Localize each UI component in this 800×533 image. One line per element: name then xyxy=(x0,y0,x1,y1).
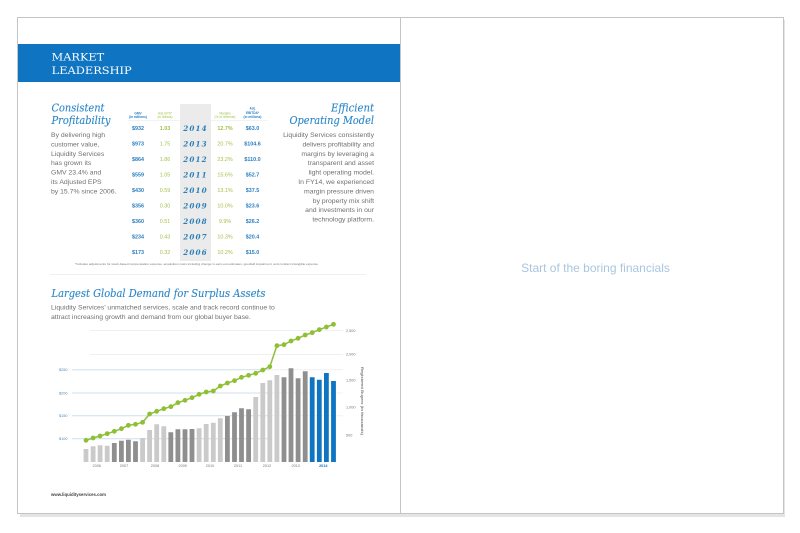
right axis labels: 2,000 xyxy=(346,352,356,356)
year column xyxy=(182,124,208,257)
left heading: Consistent Profitability xyxy=(51,102,111,127)
Adjusted EBITDA column: $15.0 xyxy=(246,250,259,256)
right axis labels xyxy=(346,329,356,438)
column headers: Adj. xyxy=(249,106,256,110)
margins column: 13.1% xyxy=(217,188,233,194)
year column: 2014 xyxy=(182,124,208,133)
x axis labels: 2006 xyxy=(92,464,101,468)
x axis labels: 2011 xyxy=(234,464,242,468)
footer URL: www.liquidityservices.com xyxy=(50,492,106,497)
Adjusted EBITDA column: $63.0 xyxy=(246,126,259,132)
margins column: 10.3% xyxy=(217,234,233,240)
Adjusted EPS column: 1.03 xyxy=(160,126,170,132)
table footnote: *Includes adjustments for stock-based compensation expense, acquisition costs including change in earn-out estimates, goodwill impairment, and contract intangible expense xyxy=(75,262,318,266)
right axis labels: 2,500 xyxy=(346,329,356,333)
right body text: In FY14, we experienced xyxy=(298,179,374,186)
header band xyxy=(18,44,400,82)
Adjusted EPS column xyxy=(160,126,170,256)
right heading: Efficient Operating Model xyxy=(290,102,375,127)
margins column: 12.7% xyxy=(217,126,233,132)
right axis labels: 1,500 xyxy=(346,378,356,382)
GMV column: $234 xyxy=(132,234,144,240)
Adjusted EBITDA column: $110.0 xyxy=(244,157,261,163)
left body text: By delivering high xyxy=(51,132,105,139)
GMV column: $430 xyxy=(132,188,144,194)
right body text: Liquidity Services consistently xyxy=(283,132,375,139)
left body text: Liquidity Services xyxy=(51,151,105,158)
right axis labels: 1,000 xyxy=(346,406,356,410)
section body text: Liquidity Services’ unmatched services, scale and track record continue to xyxy=(51,304,275,312)
year column: 2012 xyxy=(182,155,208,164)
GMV column: $360 xyxy=(132,219,144,225)
column headers: Adj. EPS* xyxy=(158,112,173,116)
left axis labels: $100 xyxy=(59,437,67,441)
left axis labels: $200 xyxy=(59,392,67,396)
combo chart xyxy=(59,324,364,468)
year column: 2013 xyxy=(182,140,208,148)
right body text: delivers profitability and xyxy=(302,141,374,148)
Adjusted EPS column: 0.43 xyxy=(160,234,170,240)
Adjusted EBITDA column xyxy=(244,126,261,256)
Adjusted EBITDA column: $26.2 xyxy=(246,219,259,225)
margins column: 20.7% xyxy=(217,142,233,148)
Adjusted EPS column: 1.05 xyxy=(160,172,170,178)
column headers: (in millions) xyxy=(244,115,261,119)
margins column: 23.2% xyxy=(217,157,233,163)
x axis labels: 2009 xyxy=(178,464,187,468)
year column: 2009 xyxy=(182,202,208,210)
left axis labels xyxy=(59,368,67,441)
year column: 2006 xyxy=(182,248,208,257)
bars: dark grey years xyxy=(114,368,305,462)
GMV column: $356 xyxy=(132,204,144,210)
left axis labels: $150 xyxy=(59,414,67,418)
right body text: margin pressure driven xyxy=(304,188,374,195)
left heading: Consistent Profitability: Profitability xyxy=(51,114,111,127)
header title: LEADERSHIP xyxy=(52,65,132,77)
financial table xyxy=(128,104,268,261)
year column: 2010 xyxy=(182,186,208,195)
year column: 2008 xyxy=(182,217,208,226)
GMV column: $559 xyxy=(132,172,144,178)
right heading: Efficient Operating Model: Efficient xyxy=(330,102,375,115)
column headers: GMV xyxy=(134,112,143,116)
header title: MARKET xyxy=(52,52,104,64)
green buyers line xyxy=(86,324,334,440)
right body text: light operating model. xyxy=(309,170,374,177)
header title xyxy=(52,52,132,77)
Adjusted EBITDA column: $23.6 xyxy=(246,204,259,210)
GMV column: $973 xyxy=(132,142,144,148)
left body text: customer value, xyxy=(51,141,99,148)
column headers: Margins xyxy=(219,112,231,116)
margins column xyxy=(217,126,233,256)
Adjusted EBITDA column: $20.4 xyxy=(246,234,259,240)
GMV column: $173 xyxy=(132,250,144,256)
column headers: (% of revenue) xyxy=(215,115,235,119)
Adjusted EPS column: 0.51 xyxy=(160,219,170,225)
right body text: and investments in our xyxy=(305,207,375,214)
column headers xyxy=(129,106,261,119)
column headers: (in millions) xyxy=(129,115,147,119)
left body text: has grown its xyxy=(51,160,92,167)
margins column: 9.9% xyxy=(219,219,231,225)
x axis labels: 2008 xyxy=(151,464,159,468)
Adjusted EPS column: 0.59 xyxy=(160,188,170,194)
Adjusted EPS column: 0.30 xyxy=(160,204,170,210)
left heading: Consistent Profitability: Consistent xyxy=(52,102,105,115)
x axis labels: 2010 xyxy=(206,464,214,468)
right axis title: Registered Buyers (in thousands) xyxy=(360,367,364,436)
year column background xyxy=(180,104,211,261)
Adjusted EBITDA column: $37.5 xyxy=(246,188,259,194)
GMV column: $932 xyxy=(132,126,144,132)
right body text: transparent and asset xyxy=(308,160,374,167)
Adjusted EPS column: 1.75 xyxy=(160,142,170,148)
right body text: technology platform. xyxy=(312,217,374,224)
right page caption: Start of the boring financials xyxy=(521,261,670,275)
margins column: 10.0% xyxy=(217,204,233,210)
bars: light grey years xyxy=(86,375,277,462)
right heading: Efficient Operating Model: Operating Model xyxy=(290,114,374,127)
left body text: its Adjusted EPS xyxy=(51,179,102,186)
year column: 2007 xyxy=(182,232,208,242)
Adjusted EPS column: 1.86 xyxy=(160,157,170,163)
x axis labels: 2012 xyxy=(263,464,271,468)
Adjusted EBITDA column: $104.6 xyxy=(244,142,261,148)
section body text: attract increasing growth and demand from our global buyer base. xyxy=(51,314,251,321)
bars: 2014 highlighted xyxy=(312,373,334,462)
right body text: by property mix shift xyxy=(313,198,374,205)
right body text: margins by leveraging a xyxy=(301,151,374,158)
x axis labels: 2014 xyxy=(319,464,328,468)
margins column: 15.6% xyxy=(217,172,233,178)
left body text: GMV 23.4% and xyxy=(51,170,101,177)
GMV column: $864 xyxy=(132,157,144,163)
margins column: 10.2% xyxy=(217,250,233,256)
gridlines xyxy=(72,330,343,439)
x axis labels xyxy=(92,464,328,468)
Adjusted EBITDA column: $52.7 xyxy=(246,172,259,178)
column headers: EBITDA* xyxy=(246,111,260,115)
Adjusted EPS column: 0.32 xyxy=(160,250,170,256)
x axis labels: 2007 xyxy=(120,464,128,468)
GMV column xyxy=(132,126,144,256)
year column: 2011 xyxy=(182,170,208,180)
x axis labels: 2013 xyxy=(291,464,300,468)
left axis labels: $250 xyxy=(59,368,67,372)
section heading: Largest Global Demand: Largest Global Demand for Surplus Assets xyxy=(51,287,266,300)
column headers: (in dollars) xyxy=(158,115,172,119)
left body text: by 15.7% since 2006. xyxy=(51,188,117,195)
right axis labels: 500 xyxy=(346,434,352,438)
